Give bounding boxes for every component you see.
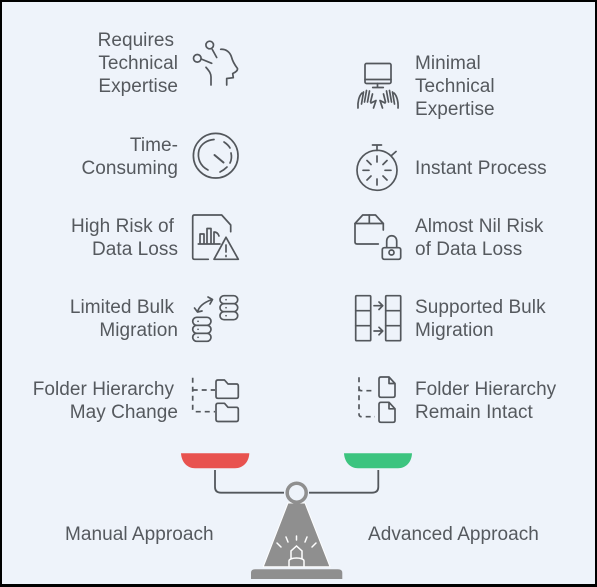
label: Time-Consuming xyxy=(81,135,178,179)
label: Manual Approach: Manual Approach xyxy=(65,524,214,545)
beam xyxy=(215,470,378,493)
label: Time-Consuming: Time- xyxy=(130,135,178,156)
icon: box with lock xyxy=(355,215,401,259)
label: Instant Process: Instant Process xyxy=(415,158,547,179)
pivot xyxy=(287,483,306,502)
icon: head with nodes xyxy=(194,41,238,85)
icon: monitor and hands xyxy=(358,64,398,108)
icon: databases swap xyxy=(193,296,238,341)
icon: clock xyxy=(193,133,238,178)
label: Folder Hierarchy Remain Intact: Remain Intact xyxy=(415,402,534,423)
label: Requires Technical Expertise: Expertise xyxy=(98,76,178,97)
icon: folder tree xyxy=(193,378,238,422)
icon: stopwatch xyxy=(357,145,397,190)
label: Requires Technical Expertise: Requires xyxy=(98,30,174,51)
label: High Risk of Data Loss xyxy=(71,216,178,260)
label: Almost Nil Risk of Data Loss xyxy=(415,216,544,260)
label: High Risk of Data Loss: Data Loss xyxy=(92,239,178,260)
green pan xyxy=(344,453,412,468)
label: Limited Bulk Migration: Limited Bulk xyxy=(70,297,174,318)
scale xyxy=(181,453,412,579)
label: Requires Technical Expertise xyxy=(98,30,178,97)
label: Minimal Technical Expertise: Minimal xyxy=(415,53,481,74)
icon: file tree xyxy=(359,377,395,422)
base plate xyxy=(251,569,342,579)
label: Time-Consuming: Consuming xyxy=(81,158,178,179)
label: Supported Bulk Migration: Migration xyxy=(415,320,494,341)
label: Folder Hierarchy May Change xyxy=(33,379,178,423)
label: Almost Nil Risk of Data Loss: Almost Nil Risk xyxy=(415,216,544,237)
label: Folder Hierarchy May Change: May Change xyxy=(70,402,178,423)
label: Supported Bulk Migration: Supported Bulk xyxy=(415,297,546,318)
label: Folder Hierarchy Remain Intact xyxy=(415,379,557,423)
icon: report with warning xyxy=(193,215,238,259)
pedestal xyxy=(263,503,330,567)
label: Requires Technical Expertise: Technical xyxy=(98,53,178,74)
red pan xyxy=(181,453,249,468)
label: Limited Bulk Migration: Migration xyxy=(99,320,178,341)
label: High Risk of Data Loss: High Risk of xyxy=(71,216,175,237)
icon: alarm light xyxy=(277,536,316,566)
label: Advanced Approach: Advanced Approach xyxy=(368,524,539,545)
label: Minimal Technical Expertise: Technical xyxy=(415,76,495,97)
label: Minimal Technical Expertise xyxy=(415,53,495,120)
label: Minimal Technical Expertise: Expertise xyxy=(415,99,495,120)
label: Folder Hierarchy Remain Intact: Folder Hierarchy xyxy=(415,379,557,400)
label: Almost Nil Risk of Data Loss: of Data Loss xyxy=(415,239,522,260)
label: Supported Bulk Migration xyxy=(415,297,546,341)
icon: table columns with arrows xyxy=(356,296,401,341)
label: Folder Hierarchy May Change: Folder Hierarchy xyxy=(33,379,174,400)
label: Limited Bulk Migration xyxy=(70,297,178,341)
